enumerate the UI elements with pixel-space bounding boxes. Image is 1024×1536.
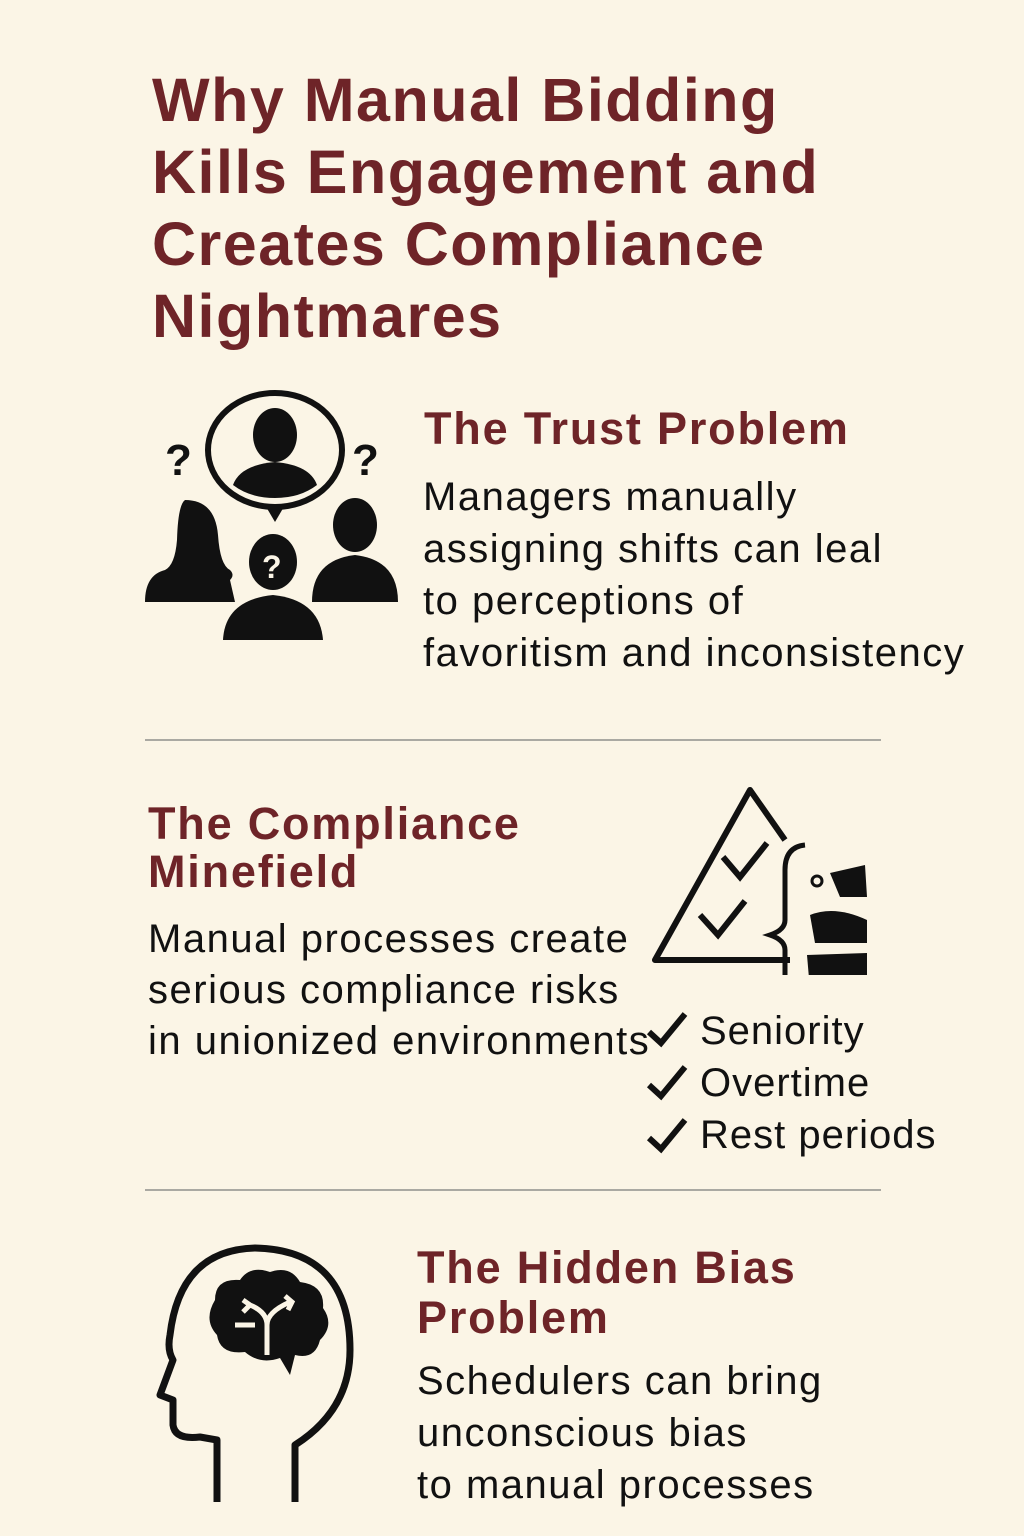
heading: hidden bias: Problem — [417, 1292, 610, 1343]
text: trust problem body: Managers manually — [423, 475, 798, 519]
text: trust problem body: favoritism and inconsistency — [423, 631, 965, 675]
heading: compliance minefield — [148, 798, 521, 897]
text: trust problem body: assigning shifts can leal — [423, 527, 883, 571]
text: hidden bias body: to manual processes — [417, 1463, 815, 1507]
text: hidden bias body: unconscious bias — [417, 1411, 748, 1455]
title — [152, 66, 819, 350]
title: Why Manual Bidding — [152, 66, 779, 134]
checklist: Seniority — [700, 1009, 865, 1053]
icon: people with questions: ? — [165, 436, 192, 485]
text: trust problem body — [423, 475, 965, 675]
title: Kills Engagement and — [152, 138, 819, 206]
icon: head with brain — [156, 1244, 354, 1502]
heading: compliance minefield: The Compliance — [148, 798, 521, 849]
heading: hidden bias — [417, 1242, 797, 1343]
icon: people with questions: ? — [352, 436, 379, 485]
text: hidden bias body: Schedulers can bring — [417, 1359, 823, 1403]
title: Creates Compliance — [152, 210, 766, 278]
icon: warning triangle with checks — [652, 787, 867, 975]
heading: hidden bias: The Hidden Bias — [417, 1242, 797, 1293]
checklist — [647, 1009, 937, 1157]
title: Nightmares — [152, 282, 503, 350]
text: hidden bias body — [417, 1359, 823, 1507]
text: compliance body: serious compliance risks — [148, 968, 620, 1012]
checklist: Rest periods — [700, 1113, 937, 1157]
checklist: Overtime — [700, 1061, 870, 1105]
heading: trust problem: The Trust Problem — [424, 403, 850, 454]
text: compliance body: in unionized environments — [148, 1019, 650, 1063]
heading: compliance minefield: Minefield — [148, 846, 359, 897]
text: compliance body — [148, 917, 650, 1063]
icon: people with questions: ? — [262, 549, 282, 585]
text: compliance body: Manual processes create — [148, 917, 629, 961]
text: trust problem body: to perceptions of — [423, 579, 744, 623]
icon: people with questions — [145, 390, 398, 640]
